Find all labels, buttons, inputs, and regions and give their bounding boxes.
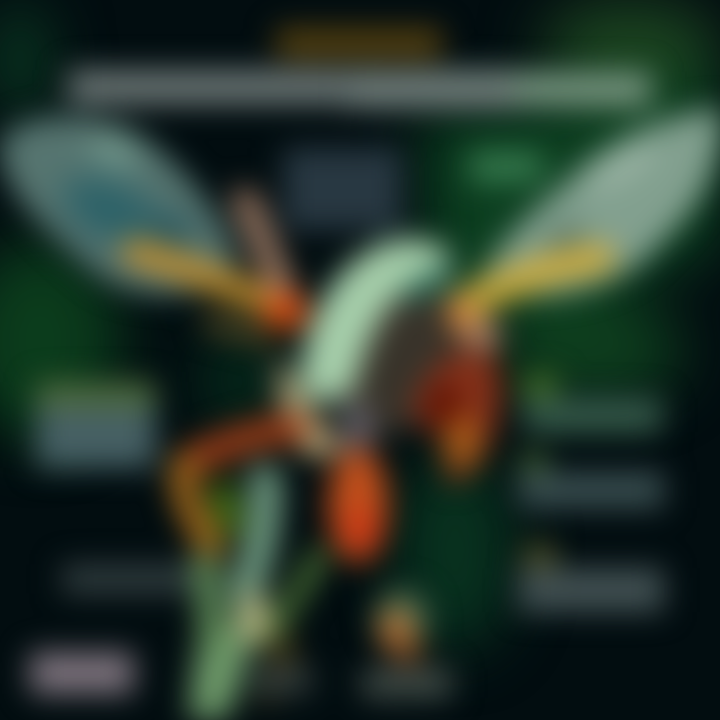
wing joint right xyxy=(424,298,502,351)
centre leg xyxy=(328,447,388,563)
caption: bottom centre left xyxy=(252,666,312,694)
callout: lower left xyxy=(62,564,192,594)
callout: top right xyxy=(470,152,542,182)
callout: right 1 xyxy=(523,375,662,432)
icon: small insect xyxy=(374,588,430,664)
wing joint left xyxy=(264,293,308,329)
upper right wing vein xyxy=(450,258,600,315)
right wing xyxy=(474,108,720,296)
caption: bottom centre right xyxy=(362,668,452,698)
right wing inner membrane xyxy=(539,133,662,263)
left wing inner membrane xyxy=(53,125,190,257)
callout: right 2 xyxy=(518,452,664,508)
insect body xyxy=(277,239,457,458)
badge: bottom left xyxy=(30,652,134,694)
plant stem xyxy=(188,480,320,720)
left wing xyxy=(0,117,235,295)
intro text block xyxy=(283,148,402,230)
upper left wing vein xyxy=(135,200,285,337)
callout: upper left xyxy=(36,382,156,468)
callout: right 3 xyxy=(518,546,664,612)
title xyxy=(68,70,651,108)
eyebrow heading xyxy=(276,28,442,58)
right hind leg xyxy=(413,350,501,486)
left front leg xyxy=(183,428,295,548)
